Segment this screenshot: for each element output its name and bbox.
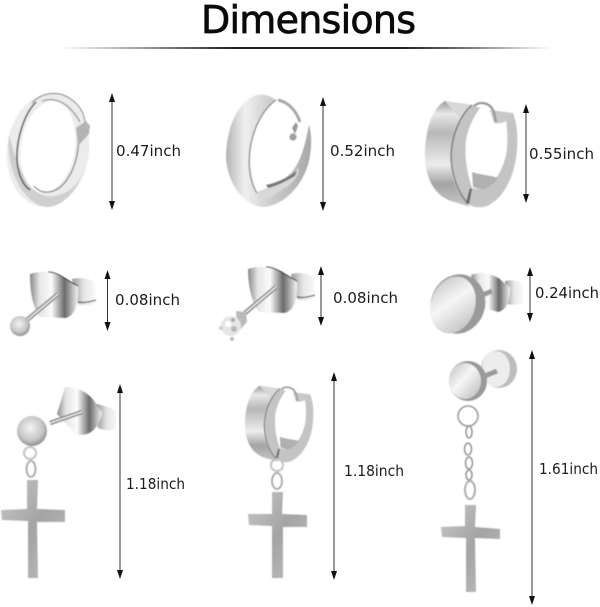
- earring: wide rounded hoop: [226, 95, 311, 207]
- title underline: [60, 47, 552, 49]
- label: 0.08inch middle: 0.08inch: [333, 289, 398, 307]
- label: 0.55inch: 0.55inch: [529, 145, 594, 163]
- earring: crystal stud: [219, 267, 315, 341]
- label: 1.18inch middle: 1.18inch: [344, 462, 404, 480]
- label: 0.24inch: 0.24inch: [535, 284, 599, 302]
- arrow: 0.08inch middle: [318, 266, 324, 326]
- arrow: 0.52inch: [320, 97, 326, 211]
- arrow: 0.55inch: [523, 104, 529, 203]
- label: 0.08inch left: 0.08inch: [115, 291, 180, 309]
- arrow: 0.24inch: [527, 267, 533, 322]
- earring: ball stud: [10, 272, 96, 336]
- earring: wide square hoop: [425, 101, 517, 207]
- earring: thin hoop: [0, 88, 96, 212]
- earring: chain with cross: [441, 350, 517, 592]
- arrow: 0.47inch: [109, 93, 115, 210]
- label: 0.52inch: 0.52inch: [330, 142, 395, 160]
- arrow: 1.18inch middle: [331, 372, 337, 580]
- arrow: 0.08inch left: [104, 270, 110, 331]
- earring: ball stud with cross: [1, 387, 117, 578]
- earring: hoop with cross: [245, 386, 313, 578]
- label: 1.18inch left: 1.18inch: [126, 475, 185, 493]
- arrow: 1.18inch left: [117, 384, 123, 579]
- earring: flat disc stud: [423, 267, 523, 341]
- label: 0.47inch: 0.47inch: [116, 142, 181, 160]
- arrow: 1.61inch: [529, 350, 535, 605]
